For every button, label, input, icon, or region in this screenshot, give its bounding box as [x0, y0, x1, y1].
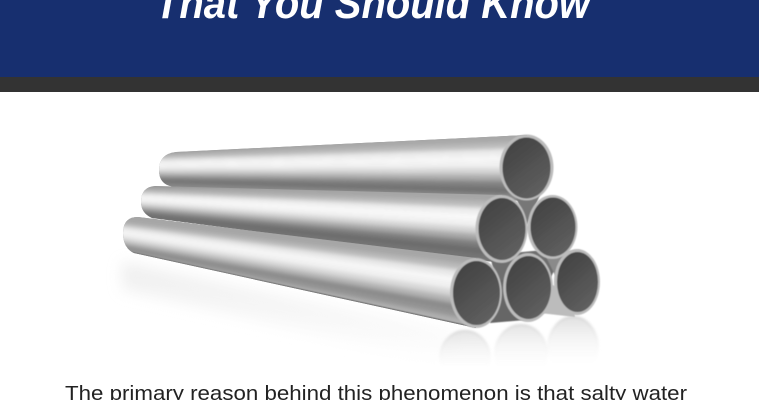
- illustration: stacked steel pipes: [123, 134, 600, 354]
- mouth: bottom left: [450, 258, 502, 328]
- mouth: bottom right: [554, 249, 600, 315]
- mouth: bottom middle: [503, 253, 553, 322]
- pipe gaps between mouths: [490, 195, 580, 323]
- floor reflection: [122, 262, 610, 386]
- top pipe body: [159, 135, 527, 201]
- middle pipe body: [141, 186, 501, 262]
- bottom pipe body: [123, 217, 476, 328]
- pipe mouths: [450, 134, 600, 328]
- mouth: middle right: [528, 195, 578, 259]
- header banner: [0, 0, 759, 77]
- mouth: top: [500, 134, 554, 200]
- header dark stripe: [0, 77, 759, 92]
- mouth: middle left: [476, 195, 528, 263]
